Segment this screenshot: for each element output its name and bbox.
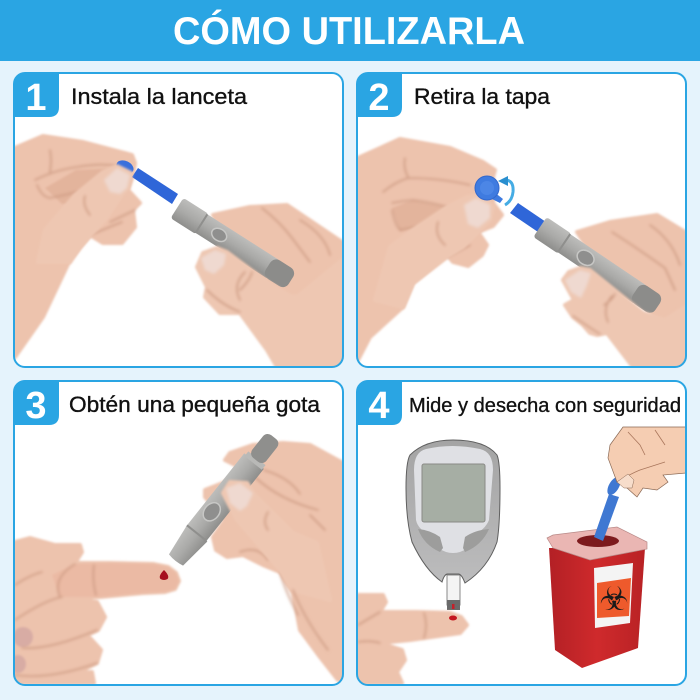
icon: left thumb — [403, 196, 492, 310]
title banner — [0, 0, 700, 61]
icon: lancet going into container — [594, 478, 620, 541]
icon: blue cap — [475, 176, 503, 203]
panel: step 1 — [14, 73, 343, 367]
icon: left thumb — [65, 162, 134, 265]
icon: right thumb and palm — [197, 248, 343, 367]
icon: right hand back fingers — [205, 443, 343, 680]
icon: sharps container — [547, 527, 647, 668]
step number badge — [14, 381, 59, 425]
arrow: twist direction — [498, 176, 513, 205]
icon: blood drop — [449, 616, 457, 620]
icon: left hand fingers — [358, 139, 502, 360]
heading: Instala la lanceta — [71, 84, 248, 109]
icon: right hand back fingers — [577, 215, 686, 330]
icon: sharps container: ☣ — [599, 579, 629, 618]
step number badge — [357, 381, 402, 425]
heading: Obtén una pequeña gota — [69, 392, 321, 417]
icon: glucose meter — [406, 440, 500, 583]
icon: left hand with pointing finger — [10, 538, 179, 683]
icon: hand dropping lancet — [608, 427, 686, 497]
step number badge — [357, 73, 402, 117]
illustration: hands installing lancet — [15, 136, 343, 367]
icon: lancet — [114, 158, 178, 204]
icon: lancing pen — [171, 198, 297, 291]
icon: exposed lancet — [510, 203, 546, 232]
panel: step 3 — [10, 381, 343, 685]
panel: step 2 — [357, 73, 686, 367]
heading: Retira la tapa — [414, 84, 551, 109]
step number badge — [14, 73, 59, 117]
icon: right thumb — [223, 482, 330, 650]
icon: finger with blood drop — [358, 595, 467, 683]
step number: 4 — [368, 385, 390, 427]
step number: 1 — [25, 77, 47, 119]
illustration: removing the cap — [358, 139, 686, 367]
icon: test strip — [447, 575, 460, 610]
panel: step 4 — [357, 381, 686, 685]
icon: blood drop — [160, 570, 168, 580]
icon: lancing pen — [169, 434, 278, 566]
heading: Mide y desecha con seguridad — [409, 395, 681, 417]
step number: 3 — [25, 385, 47, 427]
icon: lancing pen — [533, 217, 664, 316]
illustration: meter and sharps disposal — [358, 427, 686, 683]
illustration: finger prick — [10, 429, 343, 683]
title banner: CÓMO UTILIZARLA — [173, 9, 525, 53]
icon: left hand fingers — [15, 136, 140, 357]
step number: 2 — [368, 77, 390, 119]
icon: right thumb and palm — [563, 268, 686, 367]
icon: right hand back fingers — [213, 205, 343, 300]
